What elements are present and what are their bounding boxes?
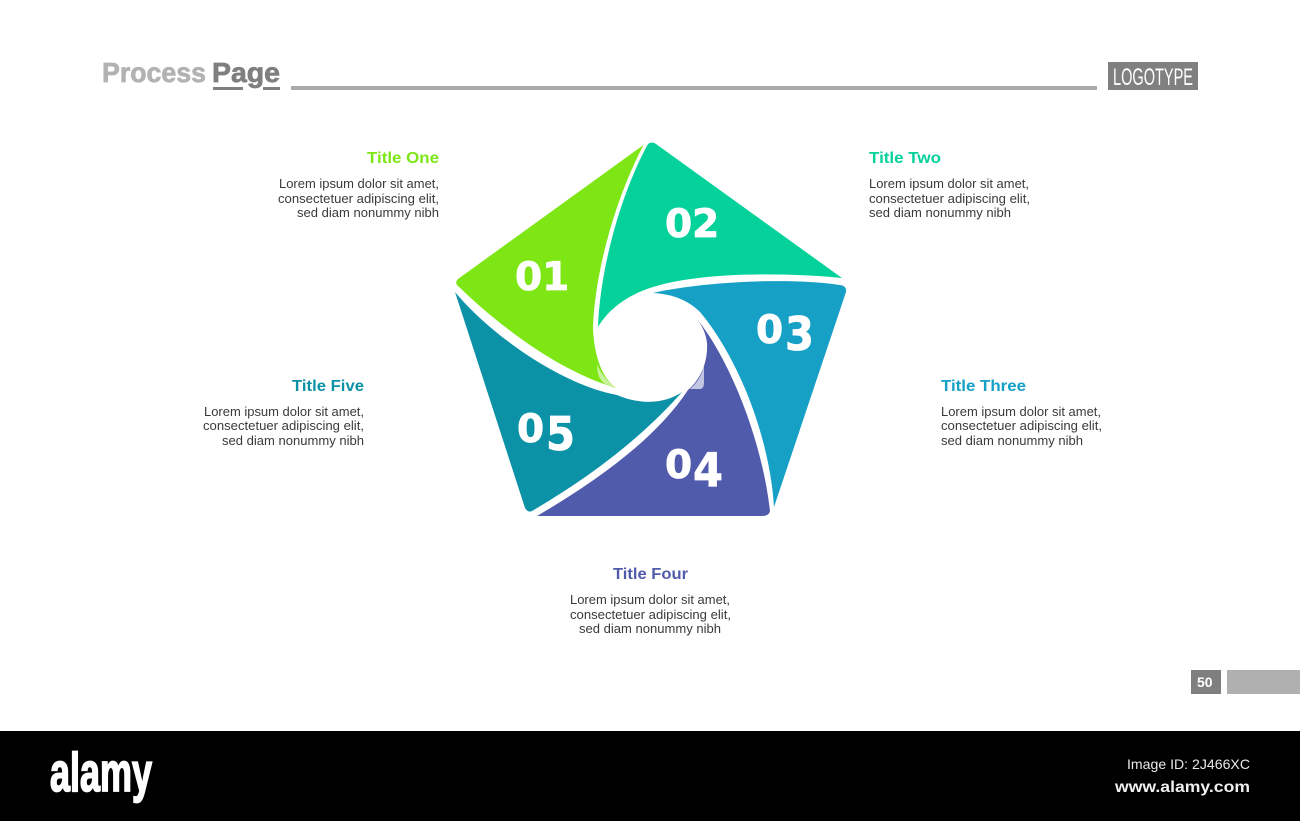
text block: title four [570, 566, 731, 636]
text block: title four: Lorem ipsum dolor sit amet, [570, 592, 730, 607]
number 04: 4 [693, 443, 723, 497]
number 03: 3 [785, 307, 814, 361]
header title: Process [102, 57, 206, 88]
page number: 50 [1197, 674, 1213, 690]
text block: title three [941, 378, 1102, 448]
number 05: 0 [517, 407, 544, 452]
text block: title five: Title Five [292, 378, 364, 395]
text block: title three: Title Three [941, 378, 1026, 395]
text block: title two: sed diam nonummy nibh [869, 205, 1011, 220]
text block: title four: sed diam nonummy nibh [579, 621, 721, 636]
text block: title two: Title Two [869, 150, 941, 167]
number 03 [756, 307, 814, 361]
number 01: 01 [515, 255, 569, 300]
centre highlights [597, 364, 616, 388]
header rule [291, 86, 1097, 90]
segment 03 [653, 281, 846, 507]
number 04 [665, 443, 723, 497]
segment 02 [598, 142, 842, 327]
logotype: LOGOTYPE [1113, 64, 1193, 91]
text block: title two: Lorem ipsum dolor sit amet, [869, 176, 1029, 191]
text block: title three: Lorem ipsum dolor sit amet, [941, 404, 1101, 419]
segment 05 [455, 292, 682, 512]
number 03: 0 [756, 308, 783, 353]
text block: title one: Lorem ipsum dolor sit amet, [279, 176, 439, 191]
logotype [1108, 62, 1198, 91]
page number [1191, 670, 1221, 694]
text block: title one: Title One [367, 150, 439, 167]
text block: title five: consectetuer adipiscing elit, [203, 418, 364, 433]
image id: Image ID: 2J466XC [1127, 756, 1250, 772]
text block: title three: sed diam nonummy nibh [941, 433, 1083, 448]
pentagon diagram [455, 142, 846, 516]
watermark footer [0, 731, 1300, 821]
segment 01 [456, 145, 644, 388]
text block: title one [278, 150, 439, 220]
text block: title five: Lorem ipsum dolor sit amet, [204, 404, 364, 419]
number 04: 0 [665, 443, 692, 488]
text block: title one: consectetuer adipiscing elit, [278, 191, 439, 206]
page tab [1227, 670, 1300, 694]
number 05: 5 [546, 407, 575, 461]
text block: title four: Title Four [613, 566, 688, 583]
header title [102, 57, 280, 90]
text block: title five [203, 378, 364, 448]
text block: title two: consectetuer adipiscing elit, [869, 191, 1030, 206]
text block: title two [869, 150, 1030, 220]
text block: title one: sed diam nonummy nibh [297, 205, 439, 220]
text block: title five: sed diam nonummy nibh [222, 433, 364, 448]
text block: title three: consectetuer adipiscing elit, [941, 418, 1102, 433]
header title: Page [212, 57, 280, 88]
number 02: 02 [665, 202, 719, 247]
alamy logo: alamy [50, 741, 152, 803]
number 05 [517, 407, 575, 461]
website: www.alamy.com [1114, 779, 1250, 796]
segment 04 [537, 319, 770, 516]
text block: title four: consectetuer adipiscing elit, [570, 607, 731, 622]
